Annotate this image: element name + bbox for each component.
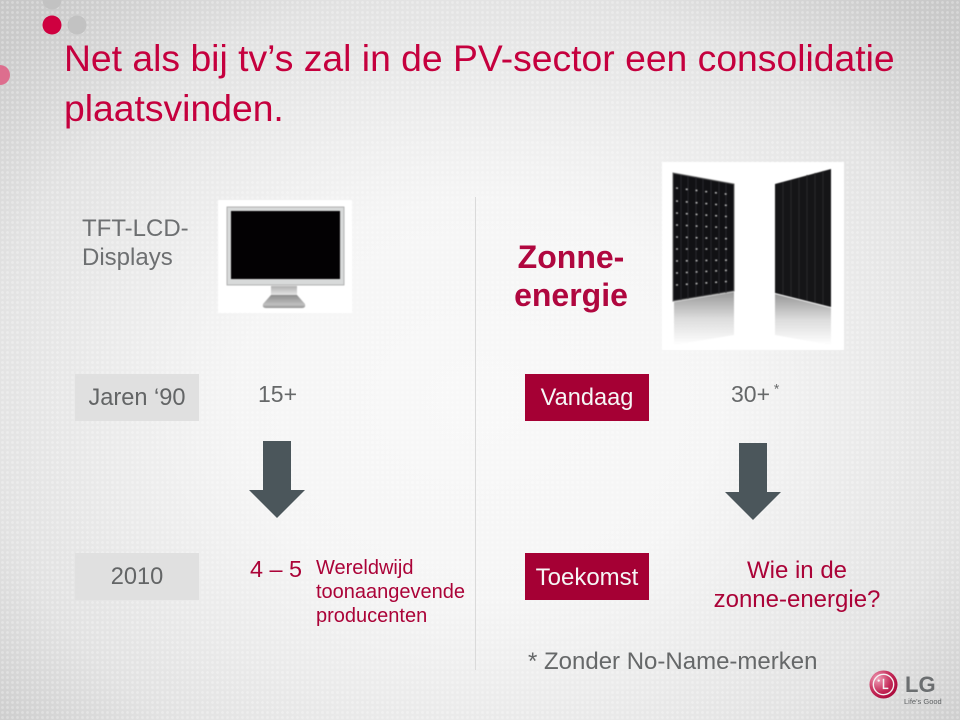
logo: LG: LG: [905, 672, 936, 697]
column divider: [475, 197, 476, 670]
title: plaatsvinden.: [64, 87, 284, 129]
heading: Zonne-energie: energie: [514, 277, 628, 313]
logo: LG: Life's Good: [904, 697, 942, 706]
box: 2010: [75, 553, 199, 600]
arrow: left down: [249, 441, 305, 518]
label: TFT-LCD-Displays: TFT-LCD-: [82, 215, 189, 242]
text: Wereldwijd toonaangevende producenten: toonaangevende: [316, 581, 465, 603]
box: Jaren 90: Jaren ‘90: [88, 385, 186, 411]
label: TFT-LCD-Displays: Displays: [82, 244, 173, 271]
text: Wereldwijd toonaangevende producenten: [316, 557, 465, 627]
icon: solar panels: [662, 162, 844, 350]
logo: LG: [870, 670, 942, 706]
box: Toekomst: [525, 553, 649, 600]
text: Wie in de zonne-energie?: zonne-energie?: [714, 586, 880, 613]
value: 15+: 15+: [258, 381, 297, 407]
text: Wereldwijd toonaangevende producenten: Wereldwijd: [316, 557, 413, 579]
footnote: * Zonder No-Name-merken: [528, 648, 817, 675]
label: TFT-LCD-Displays: [82, 215, 189, 271]
box: Vandaag: [525, 374, 649, 421]
title: [64, 37, 895, 129]
title: Net als bij tv’s zal in de PV-sector een consolidatie: [64, 37, 895, 79]
arrow: right down: [725, 443, 781, 520]
decorative circles: [0, 0, 86, 85]
text: Wie in de zonne-energie?: Wie in de: [747, 557, 847, 584]
value: 4 – 5: 4 – 5: [250, 556, 302, 582]
box: Vandaag: Vandaag: [541, 385, 633, 411]
icon: monitor: [218, 200, 352, 313]
text: Wie in de zonne-energie?: [714, 557, 880, 613]
box: Toekomst: Toekomst: [536, 564, 638, 590]
box: Jaren 90: [75, 374, 199, 421]
heading: Zonne-energie: Zonne-: [518, 239, 624, 275]
value: 30+*: 30+ *: [731, 380, 779, 407]
box: 2010: 2010: [111, 564, 163, 590]
text: Wereldwijd toonaangevende producenten: producenten: [316, 605, 427, 627]
heading: Zonne-energie: [514, 239, 628, 313]
